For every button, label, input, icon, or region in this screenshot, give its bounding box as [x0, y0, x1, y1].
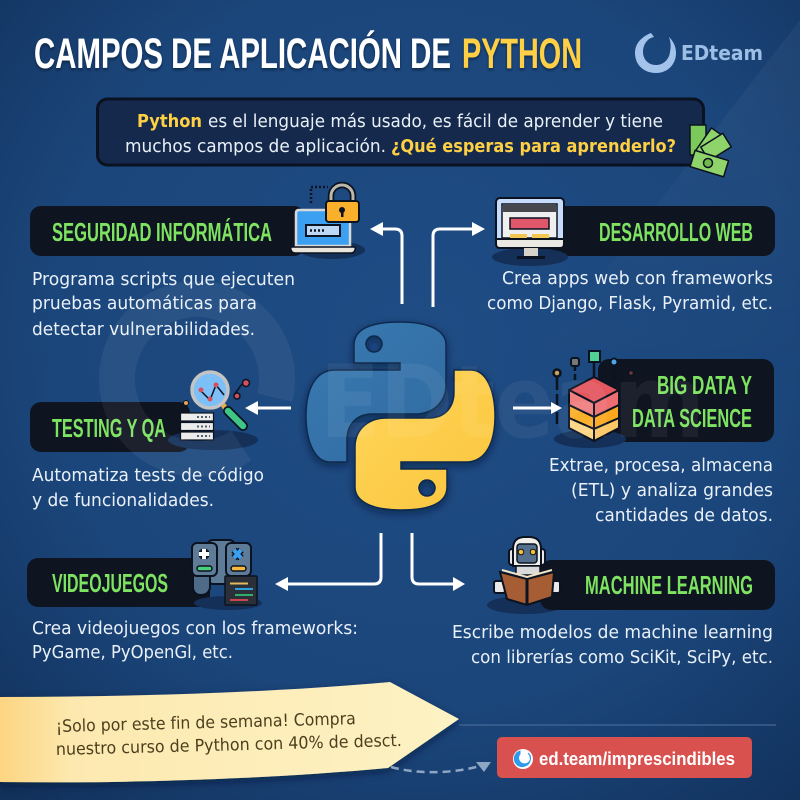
- section: Videojuegos: [27, 540, 358, 663]
- icon: gamepad and code: [192, 540, 262, 610]
- icon: monitor: [492, 198, 568, 266]
- text: Videojuegos: Crea videojuegos con los frameworks:: [32, 619, 358, 639]
- text: Videojuegos: PyGame, PyOpenGl, etc.: [32, 643, 233, 663]
- bar: Testing y QA: [30, 402, 190, 452]
- divider: [459, 724, 776, 726]
- panel: intro: es el lenguaje más usado, es fácil de aprender y tiene: [208, 112, 663, 132]
- banner: promo: [0, 682, 459, 782]
- heading: Seguridad informática: SEGURIDAD INFORMÁTICA: [52, 217, 272, 247]
- bar: Big Data: [598, 359, 774, 442]
- text: Machine Learning: [452, 623, 773, 668]
- icon: robot with book: [494, 537, 560, 605]
- text: Videojuegos: [32, 619, 358, 663]
- text: Machine Learning: con librerías como SciKit, SciPy, etc.: [471, 648, 773, 668]
- snake: yellow: [355, 370, 495, 510]
- text: Big Data: (ETL) y analiza grandes: [571, 481, 773, 501]
- text: Big Data: [549, 456, 773, 526]
- snake: blue: [306, 322, 446, 462]
- section: Seguridad informática: [30, 185, 365, 340]
- text: Seguridad informática: detectar vulnerabilidades.: [32, 320, 255, 340]
- watermark: EDteam logo: EDteam: [320, 343, 705, 461]
- bar: Machine Learning: [540, 560, 775, 610]
- arrow: to Big Data: [513, 402, 562, 414]
- text: Testing y QA: y de funcionalidades.: [32, 491, 214, 511]
- text: Testing y QA: [32, 466, 264, 511]
- arrow: to Testing: [245, 401, 291, 415]
- text: Desarrollo web: [487, 269, 773, 314]
- text: Seguridad informática: [32, 270, 295, 340]
- logo: EDteam: EDteam: [681, 41, 763, 65]
- heading: Big Data: [632, 370, 752, 433]
- arrows: from logo to top sections: [370, 222, 485, 307]
- logo: EDteam: [635, 33, 763, 73]
- panel: intro: muchos campos de aplicación.: [125, 137, 386, 157]
- banner: promo: ¡Solo por este fin de semana! Compra: [56, 709, 356, 737]
- icon: laptop with lock: [291, 185, 365, 259]
- banner: promo: nuestro curso de Python con 40% de desct.: [56, 731, 402, 760]
- arrows: from logo to bottom sections: [275, 533, 465, 591]
- heading: Big Data: BIG DATA Y: [657, 370, 752, 400]
- icon: button logo: [513, 749, 533, 769]
- python logo: [306, 322, 495, 510]
- arrow: dashed to button: [391, 762, 491, 772]
- shadow: robot: [487, 596, 563, 614]
- panel: intro: Python: [137, 112, 202, 132]
- section: Big Data: [549, 351, 774, 526]
- text: Big Data: Extrae, procesa, almacena: [549, 456, 773, 476]
- text: Machine Learning: Escribe modelos de machine learning: [452, 623, 773, 643]
- button: course link: ed.team/imprescindibles: [539, 748, 735, 769]
- bar: Seguridad informática: [30, 206, 305, 256]
- watermark: EDteam logo: [117, 299, 705, 461]
- text: Desarrollo web: Crea apps web con frameworks: [502, 269, 773, 289]
- title: CAMPOS DE APLICACIÓN DE: [34, 29, 451, 78]
- icon: magnifier and server: [168, 371, 258, 450]
- text: Desarrollo web: como Django, Flask, Pyramid, etc.: [487, 294, 773, 314]
- bar: Desarrollo web: [545, 206, 775, 256]
- button: course link: [497, 737, 752, 778]
- text: Big Data: cantidades de datos.: [595, 506, 773, 526]
- text: Testing y QA: Automatiza tests de código: [32, 466, 264, 486]
- icon: money: [690, 125, 731, 177]
- text: Seguridad informática: pruebas automáticas para: [32, 294, 257, 314]
- icon: data cube: [554, 351, 634, 448]
- title: PYTHON: [462, 30, 582, 78]
- heading: Testing y QA: TESTING Y QA: [52, 413, 166, 443]
- text: Seguridad informática: Programa scripts que ejecuten: [32, 270, 295, 290]
- panel: intro: ¿Qué esperas para aprenderlo?: [391, 137, 676, 157]
- bar: Videojuegos: [27, 558, 210, 607]
- heading: Videojuegos: VIDEOJUEGOS: [52, 568, 168, 598]
- panel: intro: [98, 99, 704, 165]
- section: Desarrollo web: [487, 198, 775, 314]
- section: Testing y QA: [30, 371, 264, 511]
- section: Machine Learning: [452, 537, 775, 668]
